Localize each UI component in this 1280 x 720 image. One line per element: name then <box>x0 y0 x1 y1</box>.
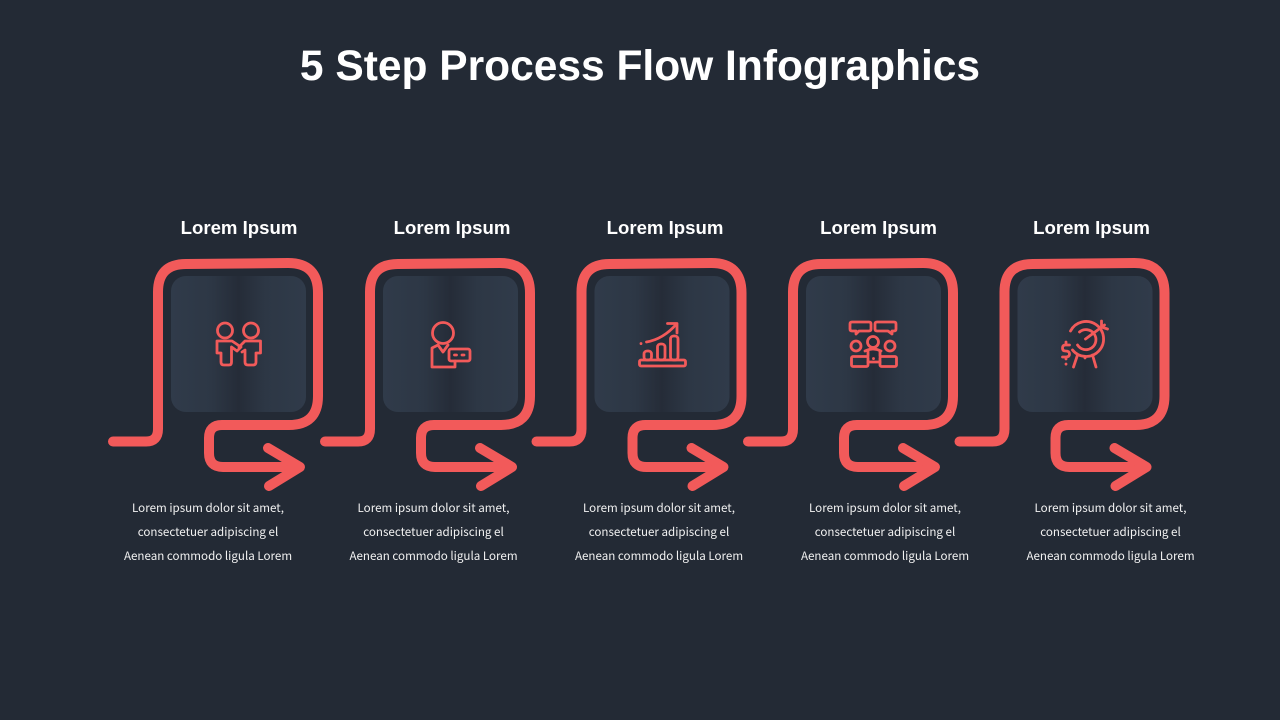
icon: handshake <box>217 323 260 365</box>
text block: step 1: consectetuer adipiscing el <box>138 524 278 540</box>
icon: team discussion <box>850 322 896 366</box>
heading: step 4: Lorem Ipsum <box>820 216 937 238</box>
text block: step 4: Lorem ipsum dolor sit amet, <box>809 500 961 516</box>
panel: step 5 <box>1018 276 1152 412</box>
text block: step 4: Aenean commodo ligula Lorem <box>801 548 969 564</box>
icon: target with dollar <box>1062 321 1108 367</box>
arrow: step 5 <box>960 263 1164 486</box>
panel: step 3 <box>594 276 730 412</box>
text block: step 1 <box>124 500 292 564</box>
text block: step 5 <box>1026 500 1195 564</box>
panel: step 2 <box>383 276 518 412</box>
arrow: step 1 <box>113 263 318 486</box>
text block: step 1: Lorem ipsum dolor sit amet, <box>132 500 284 516</box>
step 2 <box>325 263 530 486</box>
text block: step 3: consectetuer adipiscing el <box>589 524 729 540</box>
text block: step 4 <box>801 500 969 564</box>
text block: step 1: Aenean commodo ligula Lorem <box>124 548 292 564</box>
step 3 <box>536 263 742 486</box>
title: 5 Step Process Flow Infographics <box>300 43 980 90</box>
text block: step 5: Lorem ipsum dolor sit amet, <box>1035 500 1186 516</box>
text block: step 5: Aenean commodo ligula Lorem <box>1026 548 1195 564</box>
heading: step 2: Lorem Ipsum <box>394 216 510 238</box>
text block: step 4: consectetuer adipiscing el <box>815 524 955 540</box>
icon: person with card <box>432 322 470 367</box>
text block: step 3 <box>575 500 743 564</box>
arrow: step 3 <box>536 263 742 486</box>
heading: step 3: Lorem Ipsum <box>607 216 723 238</box>
step 4 <box>748 263 953 486</box>
heading: step 5: Lorem Ipsum <box>1033 216 1150 238</box>
text block: step 5: consectetuer adipiscing el <box>1040 524 1181 540</box>
text block: step 2: Aenean commodo ligula Lorem <box>349 548 518 564</box>
arrow: step 4 <box>748 263 953 486</box>
panel: step 4 <box>806 276 941 412</box>
text block: step 2: consectetuer adipiscing el <box>363 524 504 540</box>
icon: growth chart <box>640 324 686 366</box>
text block: step 3: Aenean commodo ligula Lorem <box>575 548 743 564</box>
arrow: step 2 <box>325 263 530 486</box>
panel: step 1 <box>171 276 306 412</box>
text block: step 2 <box>349 500 518 564</box>
text block: step 3: Lorem ipsum dolor sit amet, <box>583 500 735 516</box>
heading: step 1: Lorem Ipsum <box>181 216 297 238</box>
text block: step 2: Lorem ipsum dolor sit amet, <box>358 500 509 516</box>
step 5 <box>960 263 1164 486</box>
step 1 <box>113 263 318 486</box>
